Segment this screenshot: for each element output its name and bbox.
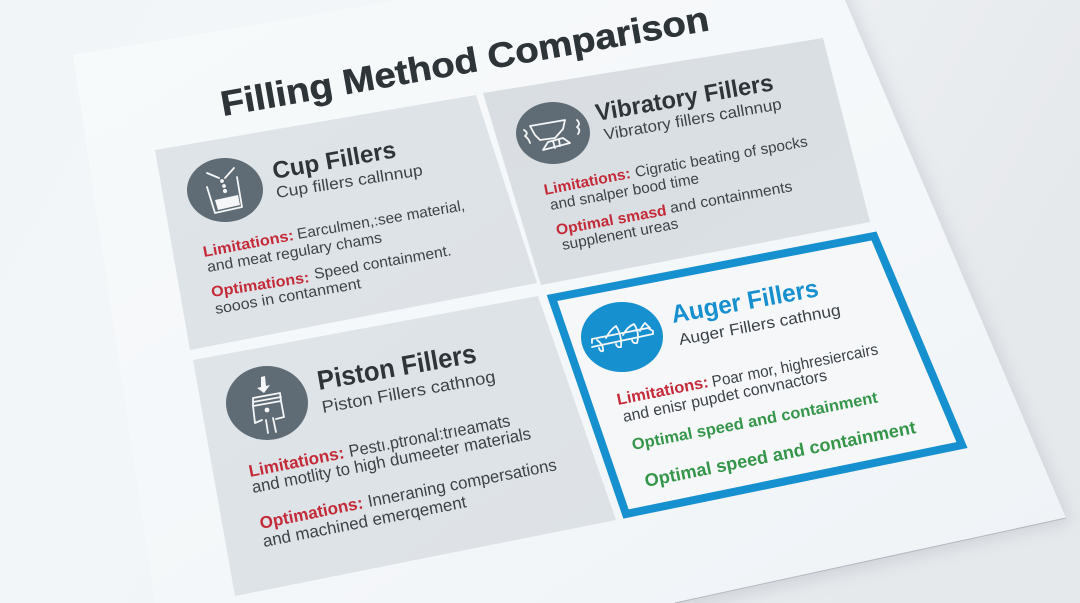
subheading: auger fillers: Auger Fillers cathnug [678,302,842,349]
optimations: cup fillers: sooos in contanment [214,275,363,318]
icon: vibratory bowl [516,102,590,164]
panel: cup fillers [155,95,537,350]
optimations: piston fillers: Inneraning compersations [366,455,558,511]
subheading: vibratory fillers: Vibratory fillers callnnup [603,96,783,144]
limitations: piston fillers: and motlity to high dumeeter materials [250,424,533,497]
panel: auger fillers (highlighted) [552,236,962,514]
subheading: piston fillers: Piston Fillers cathnog [320,367,497,417]
subheading: cup fillers: Cup fillers callnnup [275,162,424,202]
limitations: piston fillers: Limitations: [247,443,346,481]
limitations: auger fillers: Poar mor, highresiercairs [710,341,880,391]
limitations: vibratory fillers: and snalper bood time [549,170,700,214]
heading: vibratory fillers: Vibratory Fillers [593,69,775,127]
title: Filling Method Comparison [218,0,712,124]
limitations: cup fillers [202,197,466,276]
optimal: vibratory fillers: and containments [669,178,794,217]
limitations: cup fillers: Earculmen,:see material, [296,197,466,243]
icon: auger screw [581,302,663,372]
paper bottom edge [675,518,1066,603]
optimal: vibratory fillers: Optimal smasd [555,202,668,239]
optimations: cup fillers: Speed containment. [313,242,453,283]
heading: auger fillers: Auger Fillers [669,274,821,329]
heading: cup fillers: Cup Fillers [270,136,398,185]
icon: piston [226,366,308,440]
optimations: cup fillers [210,242,453,318]
limitations: vibratory fillers: Limitations: [542,165,632,199]
limitations: vibratory fillers [542,133,809,214]
limitations: auger fillers [615,341,880,426]
optimal: vibratory fillers: supplenent ureas [561,215,680,254]
paper shadow [660,0,1072,603]
optimations: piston fillers: and machined emerqement [261,492,468,551]
optimal line 1: auger fillers: Optimal speed and containment [631,389,880,454]
optimations: cup fillers: Optimations: [210,269,310,301]
heading: piston fillers: Piston Fillers [315,338,479,396]
limitations: auger fillers: Limitations: [615,374,710,409]
panel: vibratory fillers [483,38,870,285]
limitations: auger fillers: and enisr pupdet convnactors [621,367,829,426]
icon: cup filler [187,158,263,222]
optimations: piston fillers [258,455,558,551]
limitations: vibratory fillers: Cigratic beating of spocks [634,133,809,181]
optimal line 2: auger fillers: Optimal speed and containment [643,417,917,491]
optimations: piston fillers: Optimations: [258,493,365,533]
limitations: cup fillers: Limitations: [202,227,295,261]
limitations: cup fillers: and meat regulary chams [206,229,383,276]
panel: piston fillers [193,296,616,596]
optimal: vibratory fillers [555,178,794,254]
limitations: piston fillers: Pestı.ptronal:trıeamats [347,411,512,461]
